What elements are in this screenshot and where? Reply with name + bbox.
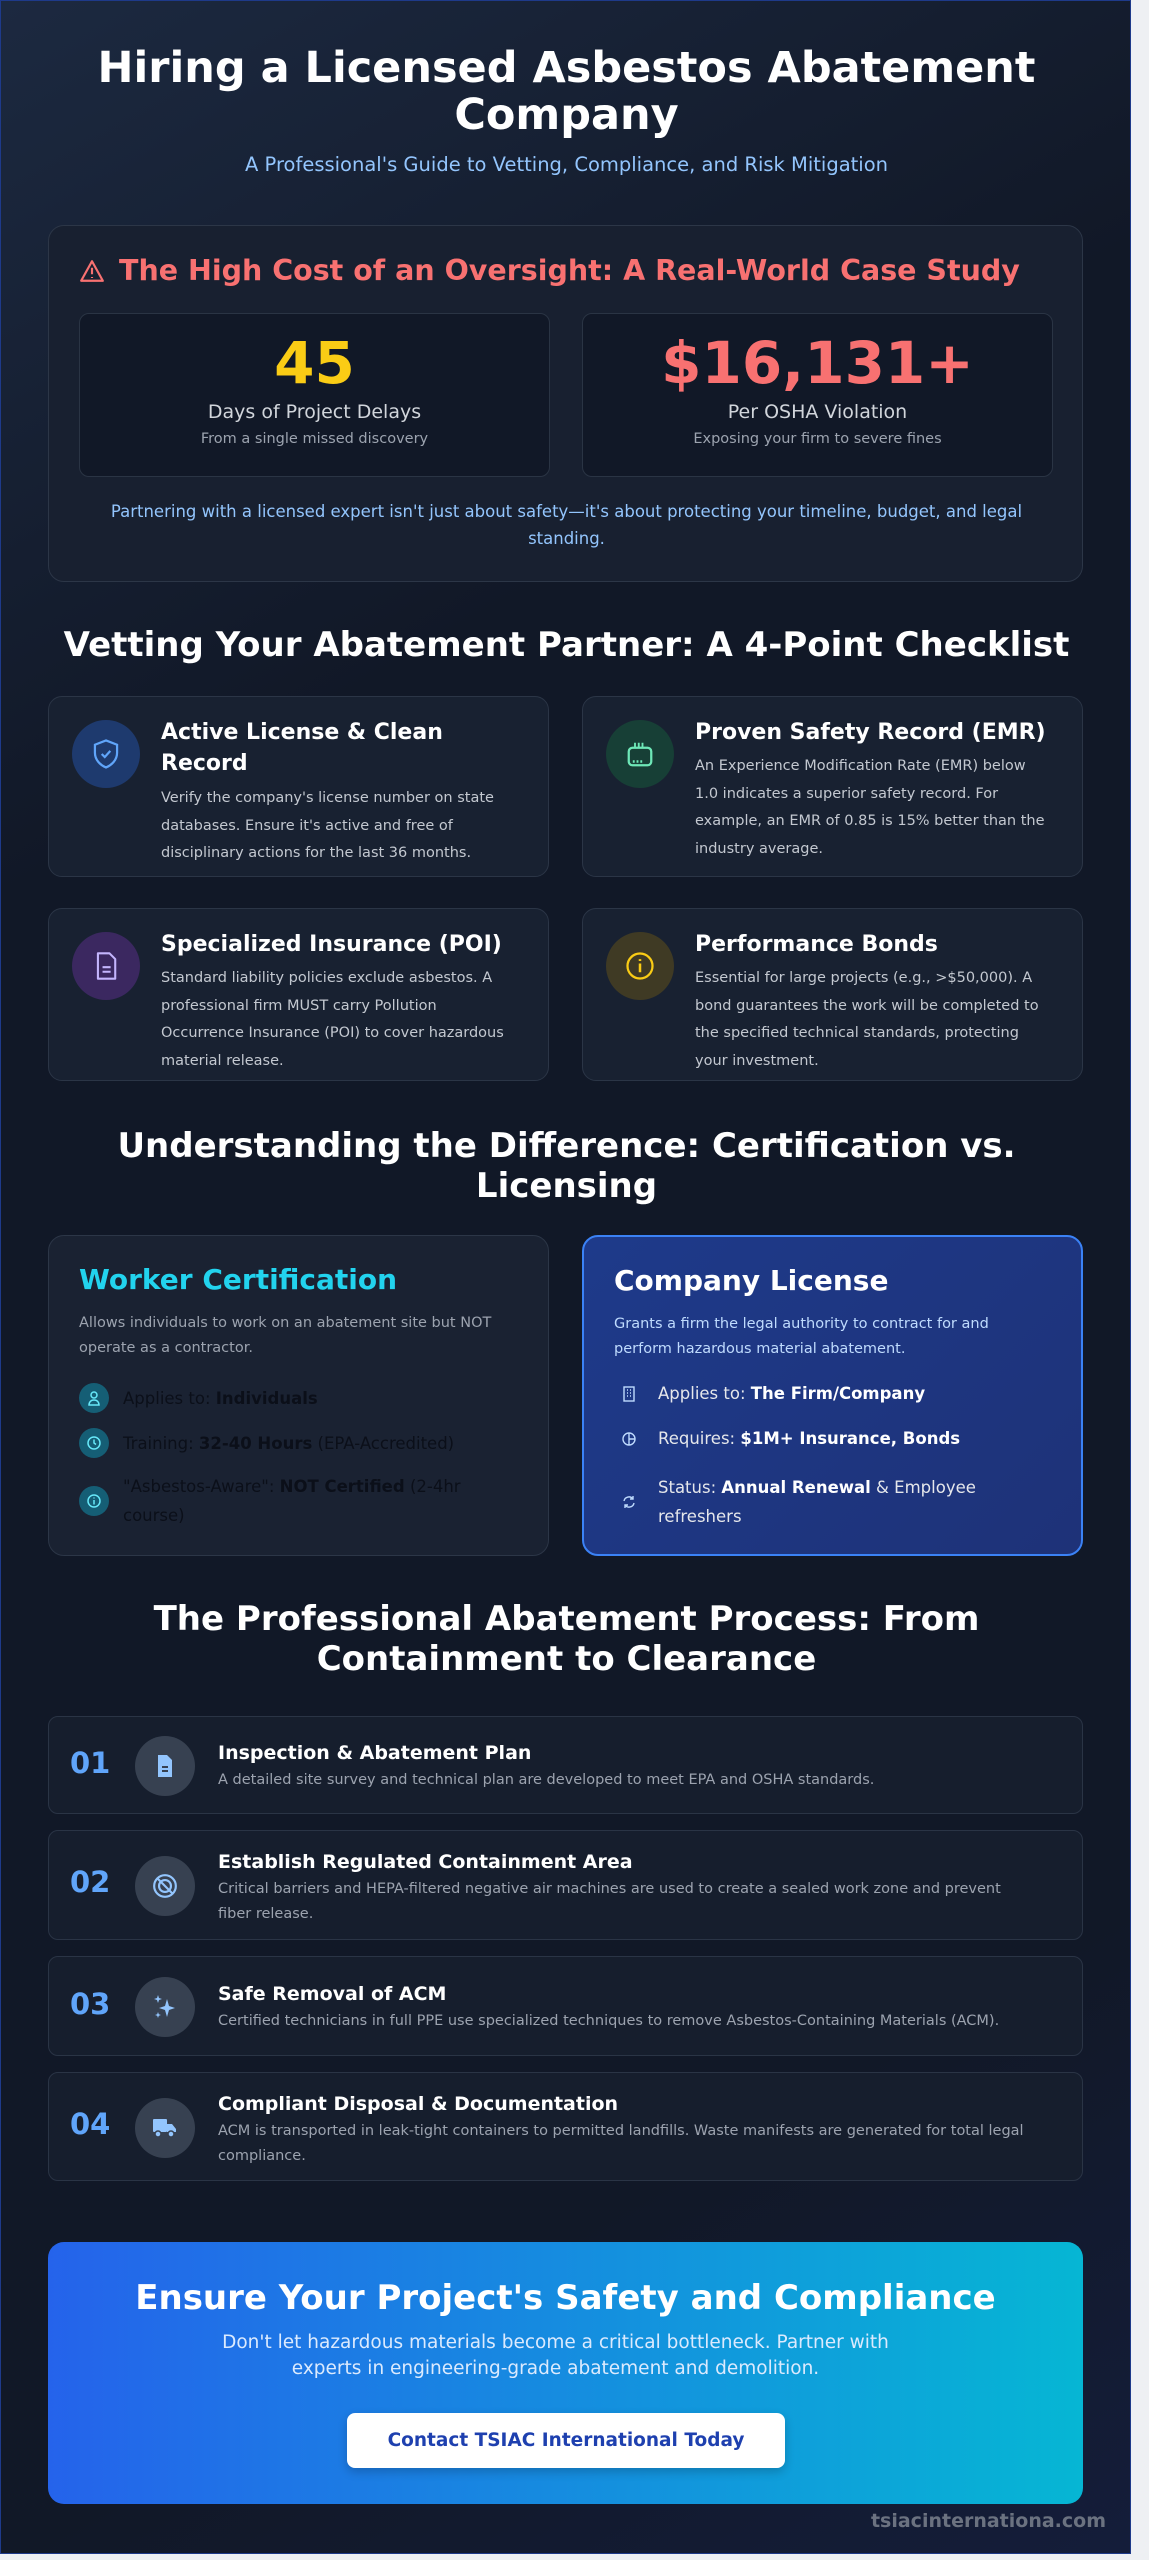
subtitle: A Professional's Guide to Vetting, Compliance, and Risk Mitigation — [245, 153, 888, 176]
card: active license — [48, 696, 549, 877]
step 03: Certified technicians in full PPE use specialized techniques to remove Asbestos-Containing Materials (ACM). — [218, 2013, 999, 2029]
CTA text: Don't let hazardous materials become a critical bottleneck. Partner with experts in engineering-grade abatement and demolition. — [222, 2332, 889, 2379]
company list: Requires: $1M+ Insurance, Bonds — [658, 1429, 960, 1448]
step 02: Establish Regulated Containment Area — [218, 1851, 633, 1873]
icon: document — [72, 932, 140, 1000]
title: Hiring a Licensed Asbestos Abatement — [98, 43, 1035, 93]
case study heading: The High Cost of an Oversight: A Real-World Case Study — [119, 254, 1020, 287]
step 04 — [48, 2072, 1083, 2181]
icon: document — [135, 1736, 195, 1796]
step 01: A detailed site survey and technical plan are developed to meet EPA and OSHA standards. — [218, 1772, 874, 1788]
icon: truck — [135, 2098, 195, 2158]
icon: info — [606, 932, 674, 1000]
step 01: 01 — [70, 1746, 110, 1780]
icon: sparkles — [135, 1977, 195, 2037]
card: insurance: Standard liability policies exclude asbestos. A professional firm MUST carry Pollution Occurrence Insurance (POI) to cover hazardous material release. — [161, 970, 504, 1068]
icon: record — [606, 720, 674, 788]
step 02 — [48, 1830, 1083, 1940]
card: active license: Active License & Clean Record — [161, 720, 443, 776]
stat: OSHA fine — [582, 313, 1053, 477]
card: safety record — [582, 696, 1083, 877]
stat: 45 days: From a single missed discovery — [201, 431, 428, 447]
panel: worker certification — [48, 1235, 549, 1556]
stat: 45 days — [79, 313, 550, 477]
heading: process — [154, 1599, 979, 1679]
title: Company — [454, 90, 679, 140]
card: active license: Verify the company's license number on state databases. Ensure it's active and free of disciplinary actions for the last 36 months. — [161, 790, 494, 861]
worker list: Applies to: Individuals — [123, 1388, 318, 1408]
card: insurance — [48, 908, 549, 1081]
CTA button: Contact TSIAC International Today — [388, 2430, 744, 2451]
step 03: 03 — [70, 1987, 110, 2021]
heading: checklist: Vetting Your Abatement Partner: A 4-Point Checklist — [64, 625, 1069, 665]
card: bonds: Essential for large projects (e.g., >$50,000). A bond guarantees the work will be completed to the specified technical standards, protecting your investment. — [695, 970, 1039, 1068]
company list: Status: Annual Renewal & Employee refreshers — [658, 1478, 976, 1526]
step 01 — [48, 1716, 1083, 1814]
card: insurance: Specialized Insurance (POI) — [161, 932, 502, 957]
heading: process: The Professional Abatement Process: From — [154, 1599, 979, 1639]
stat: OSHA fine: Exposing your firm to severe fines — [693, 431, 942, 447]
icon: shield — [72, 720, 140, 788]
CTA button — [347, 2413, 785, 2468]
step 01: Inspection & Abatement Plan — [218, 1742, 531, 1764]
stat: OSHA fine: Per OSHA Violation — [728, 401, 907, 423]
CTA heading: Ensure Your Project's Safety and Compliance — [135, 2278, 996, 2318]
heading: certification vs licensing: Licensing — [476, 1166, 657, 1206]
card: safety record: An Experience Modification Rate (EMR) below 1.0 indicates a superior safety record. For example, an EMR of 0.85 is 15% better than the industry average. — [695, 758, 1045, 856]
company heading: Company License — [614, 1264, 888, 1297]
worker list — [79, 1383, 461, 1525]
card: safety record: Proven Safety Record (EMR) — [695, 720, 1046, 745]
panel: company license — [582, 1235, 1083, 1556]
step 02: Critical barriers and HEPA-filtered negative air machines are used to create a sealed work zone and prevent fiber release. — [218, 1881, 1001, 1922]
step 04: 04 — [70, 2107, 110, 2141]
company list: Applies to: The Firm/Company — [658, 1384, 925, 1403]
worker heading: Worker Certification — [79, 1263, 397, 1296]
step 04: ACM is transported in leak-tight containers to permitted landfills. Waste manifests are generated for total legal compliance. — [218, 2123, 1024, 2164]
title — [98, 43, 1035, 140]
heading: certification vs licensing — [117, 1126, 1016, 1206]
step 02: 02 — [70, 1865, 110, 1899]
CTA banner — [48, 2242, 1083, 2504]
worker desc: Allows individuals to work on an abatement site but NOT operate as a contractor. — [79, 1315, 491, 1356]
stat: 45 days: Days of Project Delays — [208, 401, 421, 423]
company desc: Grants a firm the legal authority to contract for and perform hazardous material abatement. — [614, 1316, 989, 1357]
panel: case study — [48, 225, 1083, 582]
card: bonds — [582, 908, 1083, 1081]
step 04: Compliant Disposal & Documentation — [218, 2093, 618, 2115]
icon: no-entry — [135, 1856, 195, 1916]
company list — [622, 1384, 976, 1526]
step 03: Safe Removal of ACM — [218, 1983, 446, 2005]
stat: 45 days: 45 — [274, 329, 355, 397]
heading: process: Containment to Clearance — [317, 1639, 816, 1679]
case study note: Partnering with a licensed expert isn't just about safety—it's about protecting your timeline, budget, and legal standing. — [111, 502, 1022, 548]
card: bonds: Performance Bonds — [695, 932, 938, 957]
footer watermark: tsiacinternationa.com — [871, 2510, 1106, 2532]
worker list: "Asbestos-Aware": NOT Certified (2-4hr course) — [123, 1477, 461, 1525]
heading: certification vs licensing: Understanding the Difference: Certification vs. — [117, 1126, 1016, 1166]
stat: OSHA fine: $16,131+ — [661, 329, 974, 397]
step 03 — [48, 1956, 1083, 2056]
worker list: Training: 32-40 Hours (EPA-Accredited) — [123, 1434, 454, 1452]
